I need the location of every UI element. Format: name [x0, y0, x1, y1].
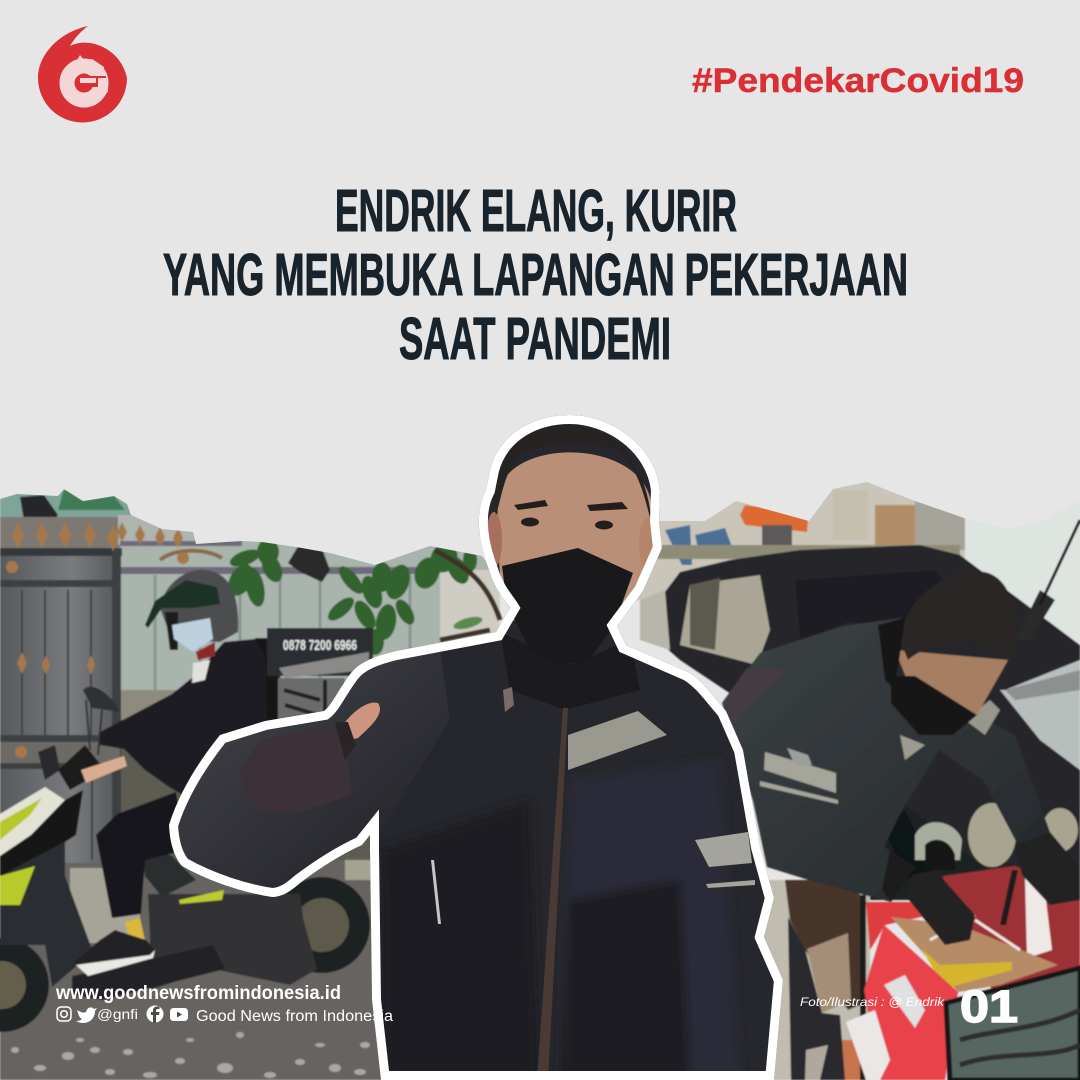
twitter icon: [76, 1007, 97, 1023]
car: [640, 520, 1080, 900]
rider face mask: [172, 618, 213, 652]
rider hand: [81, 756, 127, 783]
phone number on box: 0878 7200 6966: [283, 637, 357, 654]
jacket: [160, 410, 800, 1080]
street background: [620, 480, 965, 600]
wall and sky strip behind the gate: [0, 489, 500, 700]
rider trousers: [96, 792, 186, 918]
rider: [74, 570, 267, 976]
black bag and branch: [288, 543, 500, 640]
logo: [38, 26, 127, 122]
title: SAAT PANDEMI: [399, 306, 671, 372]
page number: 01: [960, 981, 1018, 1032]
photo credit: Foto/Ilustrasi : @ Endrik: [800, 995, 945, 1009]
facebook icon: [146, 1006, 164, 1023]
eyebrows and eyes: [514, 500, 628, 530]
youtube icon: [170, 1008, 188, 1021]
gate: [0, 522, 189, 863]
courier gloves: [905, 832, 1080, 945]
photo: rider on motorbike with gate and plants: [0, 489, 500, 1080]
title: ENDRIK ELANG, KURIR: [335, 178, 737, 244]
rider sock and shoe: [124, 918, 146, 940]
glove and thumb: [240, 703, 380, 812]
hashtag: #PendekarCovid19: [692, 62, 1024, 100]
portrait: man in riding jacket with white cutout outline: [160, 410, 800, 1080]
delivery box: [255, 628, 373, 725]
white wall: [964, 518, 1080, 646]
pavement: [760, 880, 870, 1080]
rider hoodie: [100, 639, 267, 797]
hair: [494, 424, 652, 525]
courier jacket: [722, 618, 1050, 902]
face: [486, 452, 657, 625]
ground: [0, 690, 400, 1080]
website credit: www.goodnewsfromindonesia.id: [55, 983, 341, 1004]
courier legs: [785, 880, 860, 1080]
website credit: [55, 983, 393, 1025]
jacket details: [431, 687, 755, 1080]
face mask: [502, 548, 633, 665]
red bags and delivery box: [846, 866, 1080, 1080]
plants: [223, 539, 484, 655]
channel name: Good News from Indonesia: [196, 1008, 393, 1025]
title: [163, 178, 908, 372]
rider helmet: [160, 570, 238, 642]
white outline around portrait: [169, 415, 783, 1080]
courier head and mask: [878, 572, 1016, 735]
motorbike: [0, 687, 370, 1032]
handle: @gnfi: [97, 1006, 138, 1022]
instagram icon: [57, 1007, 71, 1021]
photo: courier packing orders beside a car: [620, 480, 1080, 1080]
